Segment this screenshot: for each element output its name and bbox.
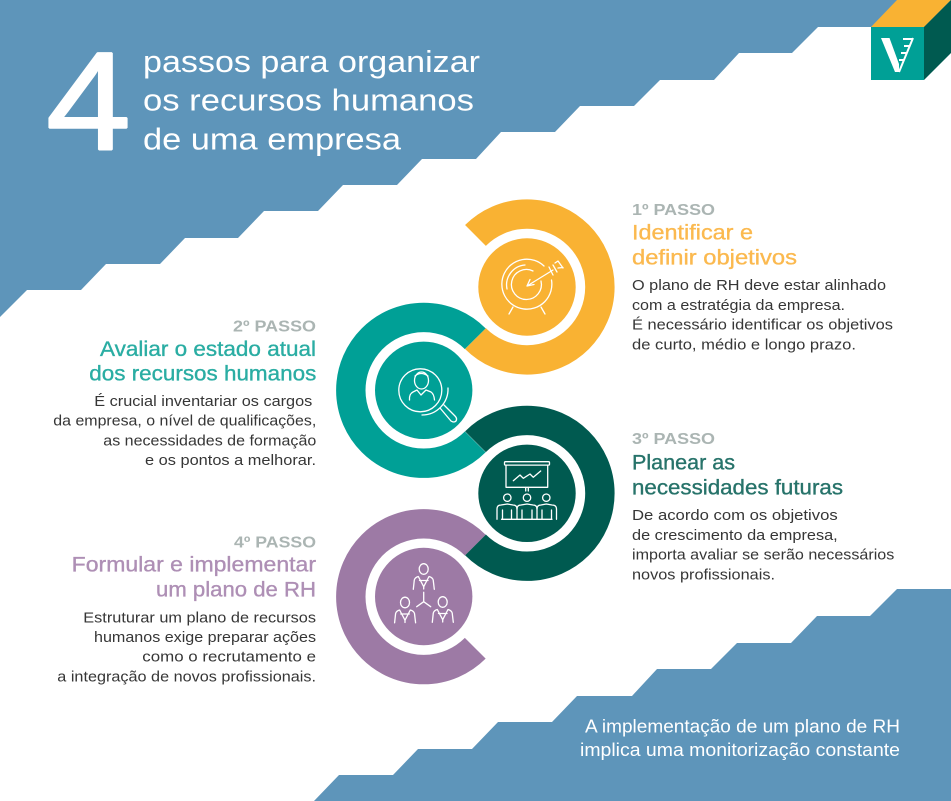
- step 2 graphic: teal ring with person search icon: [351, 317, 475, 463]
- text: step 1: [632, 202, 893, 353]
- title: [46, 22, 480, 180]
- closing message: implica uma monitorização constante: [580, 740, 900, 760]
- text: step 1: 1º PASSO: [632, 202, 715, 219]
- text: step 4: Estruturar um plano de recursos: [83, 609, 316, 626]
- step 4 graphic: purple ring with org chart icon: [351, 524, 475, 670]
- text: step 1: Identificar e: [632, 221, 753, 244]
- text: step 4: 4º PASSO: [234, 535, 316, 552]
- text: step 2: 2º PASSO: [233, 319, 316, 336]
- text: step 1: É necessário identificar os objetivos: [632, 317, 893, 334]
- logo cube: [871, 0, 951, 80]
- text: step 3: De acordo com os objetivos: [632, 507, 838, 524]
- text: step 1: de curto, médio e longo prazo.: [632, 336, 856, 353]
- text: step 3: 3º PASSO: [632, 431, 715, 448]
- title text: os recursos humanos: [143, 82, 474, 118]
- text: step 4: a integração de novos profissionais.: [57, 669, 316, 686]
- text: step 2: dos recursos humanos: [89, 363, 316, 386]
- text: step 1: O plano de RH deve estar alinhado: [632, 277, 886, 294]
- text: step 3: de crescimento da empresa,: [632, 527, 838, 544]
- text: step 1: com a estratégia da empresa.: [632, 297, 845, 314]
- title text: de uma empresa: [143, 122, 402, 156]
- icon: target with arrow: [502, 259, 563, 314]
- text: step 2: da empresa, o nível de qualificações,: [53, 413, 316, 430]
- text: step 3: importa avaliar se serão necessários: [632, 547, 894, 564]
- text: step 2: Avaliar o estado atual: [100, 338, 316, 361]
- text: step 3: necessidades futuras: [632, 476, 843, 499]
- title text: passos para organizar: [143, 44, 480, 79]
- text: step 4: Formular e implementar: [72, 554, 316, 577]
- text: step 3: [632, 431, 894, 584]
- text: step 2: e os pontos a melhorar.: [145, 452, 316, 469]
- text: step 3: novos profissionais.: [632, 567, 775, 584]
- text: step 2: [53, 319, 316, 469]
- closing message: [580, 716, 900, 760]
- text: step 2: as necessidades de formação: [103, 432, 316, 449]
- text: step 4: um plano de RH: [156, 579, 316, 602]
- text: step 4: humanos exige preparar ações: [94, 629, 316, 646]
- step 1 graphic: orange ring with target icon: [475, 214, 600, 360]
- text: step 1: definir objetivos: [632, 246, 797, 269]
- step 3 graphic: dark green ring with presentation icon: [475, 420, 600, 566]
- big number 4: 4: [46, 22, 131, 180]
- top staircase background: [0, 0, 951, 317]
- icon: audience and chart board: [497, 462, 556, 519]
- icon: magnifier over person: [399, 369, 457, 422]
- text: step 3: Planear as: [632, 451, 735, 474]
- closing message: A implementação de um plano de RH: [585, 716, 900, 736]
- bottom staircase background: [314, 589, 951, 801]
- icon: three people hierarchy: [395, 564, 453, 623]
- title text: [143, 44, 480, 156]
- text: step 4: [57, 535, 316, 686]
- text: step 4: como o recrutamento e: [142, 649, 316, 666]
- text: step 2: É crucial inventariar os cargos: [94, 393, 312, 410]
